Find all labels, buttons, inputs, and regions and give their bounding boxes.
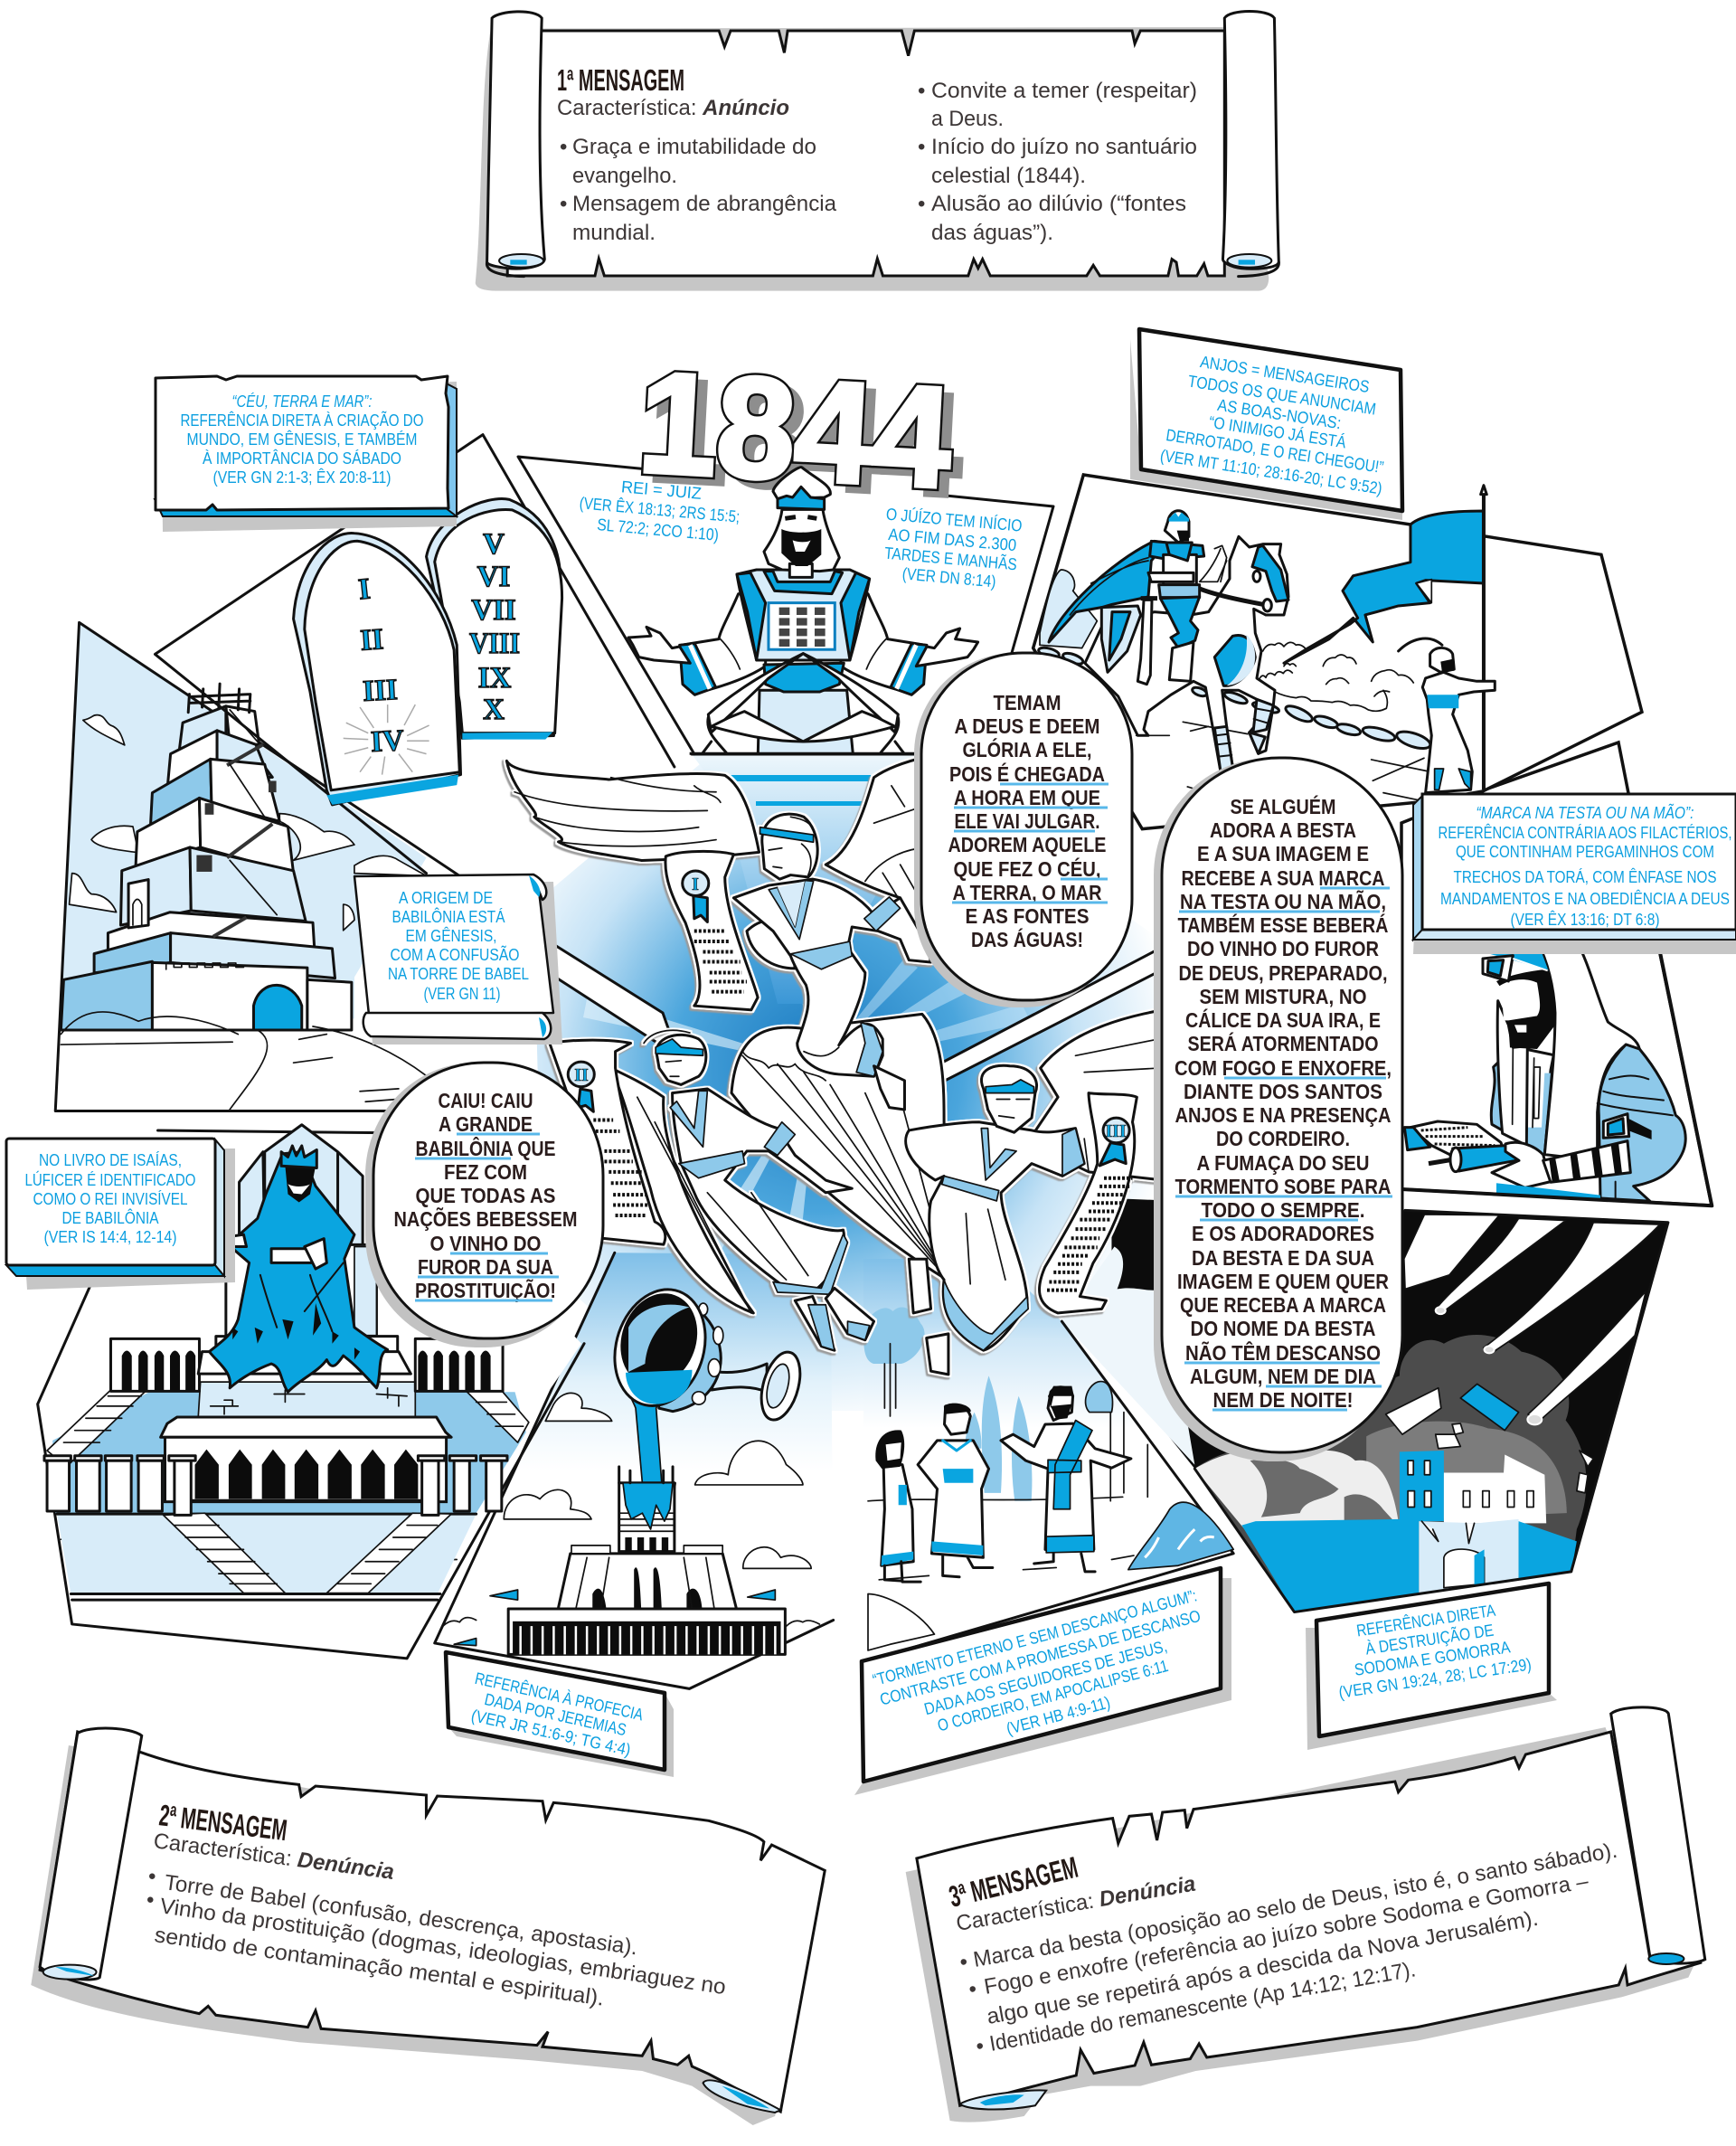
speech bubble: SE ALGUEM ADORA A BESTA: TODO O SEMPRE. bbox=[1201, 1198, 1365, 1222]
panel: paradise rest bbox=[862, 1259, 1233, 1662]
callout scroll: origem de Babilonia: NA TORRE DE BABEL bbox=[388, 964, 529, 983]
speech bubble: SE ALGUEM ADORA A BESTA: DIANTE DOS SANTOS bbox=[1184, 1080, 1382, 1103]
roman numerals on tablets: IX bbox=[478, 662, 511, 695]
callout: tormento eterno: (VER HB 4:9-11) bbox=[1005, 1692, 1112, 1738]
ground bbox=[868, 1497, 1134, 1580]
speech bubble: SE ALGUEM ADORA A BESTA: CÁLICE DA SUA IRA, E bbox=[1185, 1007, 1381, 1032]
trees bbox=[863, 1308, 925, 1364]
1844 number: 1844 bbox=[635, 343, 955, 518]
centre bush outlines bbox=[1260, 642, 1413, 711]
callout: anjos mensageiros: AS BOAS-NOVAS: bbox=[1216, 395, 1343, 432]
speech bubble: CAIU CAIU: PROSTITUIÇÃO! bbox=[415, 1278, 556, 1302]
speech bubble: SE ALGUEM ADORA A BESTA: NA TESTA OU NA MÃO, bbox=[1180, 889, 1386, 913]
seal numerals on scrolls: I bbox=[692, 874, 699, 894]
scroll: 3a mensagem: Característica: Denúncia bbox=[954, 1872, 1197, 1936]
illustration: stone tablets bbox=[294, 499, 562, 805]
youth bbox=[918, 1441, 989, 1557]
ground and road bbox=[61, 1012, 427, 1110]
cloud outlines bbox=[70, 715, 427, 931]
callout: anjos mensageiros: TODOS OS QUE ANUNCIAM bbox=[1187, 371, 1377, 419]
speech bubble: TEMAM A DEUS: A DEUS E DEEM bbox=[955, 714, 1099, 738]
scroll: 1a mensagem: • bbox=[918, 79, 925, 103]
callout: profecia jeremias: DADA POR JEREMIAS bbox=[483, 1689, 628, 1739]
tunic bbox=[737, 570, 870, 660]
scroll: 3a mensagem: Fogo e enxofre (referência ao juízo sobre Sodoma e Gomorra – bbox=[982, 1868, 1590, 1999]
callout: tormento eterno: “TORMENTO ETERNO E SEM DESCANÇO ALGUM”: bbox=[871, 1585, 1199, 1689]
angel 1 scroll bbox=[665, 851, 758, 1010]
scroll: 3a mensagem: • bbox=[967, 1977, 978, 2002]
speech bubble: TEMAM A DEUS: QUE FEZ O CÉU, bbox=[953, 856, 1101, 881]
callout scroll: origem de Babilonia: COM A CONFUSÃO bbox=[391, 945, 519, 964]
city bbox=[1400, 1451, 1444, 1521]
callout: sodoma e gomorra: À DESTRUIÇÃO DE bbox=[1364, 1621, 1495, 1659]
callout: sodoma e gomorra: SODOMA E GOMORRA bbox=[1353, 1637, 1512, 1679]
banner bbox=[1284, 511, 1484, 663]
callout: anjos mensageiros: (VER MT 11:10; 28:16-20; LC 9:52) bbox=[1159, 446, 1383, 497]
speech bubble: SE ALGUEM ADORA A BESTA: DO NOME DA BESTA bbox=[1190, 1317, 1376, 1340]
speech bubble: CAIU CAIU: BABILÔNIA QUE bbox=[416, 1136, 555, 1160]
seal numerals on scrolls: III bbox=[1105, 1121, 1127, 1141]
callout: tormento eterno: O CORDEIRO, EM APOCALIPSE 6:11 bbox=[936, 1656, 1170, 1735]
label: juizo 2300 tardes: TARDES E MANHÃS bbox=[883, 544, 1018, 573]
callout scroll: origem de Babilonia bbox=[354, 874, 562, 1045]
speech bubble: SE ALGUEM ADORA A BESTA: TORMENTO SOBE PARA bbox=[1175, 1175, 1391, 1198]
scroll: 3a mensagem: Identidade do remanescente (Ap 14:12; 12:17). bbox=[987, 1957, 1418, 2056]
scroll: 1a mensagem: a Deus. bbox=[931, 107, 1004, 131]
scroll: 1a mensagem: evangelho. bbox=[572, 164, 677, 188]
speech bubble: SE ALGUEM ADORA A BESTA: TAMBÉM ESSE BEBERÁ bbox=[1177, 912, 1389, 937]
scarves bbox=[708, 654, 803, 733]
seal numerals on scrolls: II bbox=[574, 1065, 589, 1085]
callout scroll: origem de Babilonia: BABILÔNIA ESTÁ bbox=[392, 907, 505, 926]
rider bbox=[1150, 541, 1204, 559]
scroll: 2a mensagem bbox=[31, 1728, 825, 2125]
callout: sodoma e gomorra: REFERÊNCIA DIRETA bbox=[1355, 1601, 1497, 1640]
callout: profecia jeremias bbox=[446, 1652, 674, 1777]
callout: ceu, terra e mar: MUNDO, EM GÊNESIS, E TAMBÉM bbox=[186, 430, 418, 449]
label: rei = juiz: REI = JUIZ bbox=[620, 477, 703, 503]
speech bubble: SE ALGUEM ADORA A BESTA: SE ALGUÉM bbox=[1230, 794, 1336, 818]
scroll: 1a mensagem: • bbox=[918, 192, 925, 216]
panel: king pedestal bbox=[692, 754, 922, 1004]
speech bubble: TEMAM A DEUS: E AS FONTES bbox=[966, 904, 1089, 928]
woman bbox=[882, 1465, 913, 1565]
angel 2 robe bbox=[673, 1089, 852, 1292]
angel 1 right wing bbox=[826, 757, 927, 960]
callout: sodoma e gomorra bbox=[1306, 1584, 1557, 1750]
scroll: 1a mensagem: 1ª MENSAGEM bbox=[557, 63, 684, 97]
scroll: 2a mensagem: • bbox=[146, 1864, 157, 1889]
horse bbox=[1085, 536, 1288, 771]
castle bbox=[619, 1483, 675, 1552]
callout: profecia jeremias: REFERÊNCIA À PROFECIA bbox=[473, 1669, 646, 1725]
callout: ceu, terra e mar: À IMPORTÂNCIA DO SÁBADO bbox=[203, 449, 401, 468]
angel 3 robe bbox=[906, 1122, 1084, 1350]
poured liquid bbox=[623, 1370, 693, 1529]
scroll: 1a mensagem: Graça e imutabilidade do bbox=[572, 135, 816, 159]
angel group bbox=[506, 757, 1163, 1375]
scroll: 1a mensagem bbox=[476, 11, 1278, 291]
left bush bbox=[1040, 570, 1097, 648]
label: juizo 2300 tardes: O JÚÍZO TEM INÍCIO bbox=[885, 505, 1023, 535]
speech bubble: SE ALGUEM ADORA A BESTA: NEM DE NOITE! bbox=[1213, 1388, 1353, 1412]
roman numerals on tablets: III bbox=[362, 674, 399, 708]
label: rei = juiz bbox=[577, 473, 742, 546]
callout scroll: origem de Babilonia: EM GÊNESIS, bbox=[405, 926, 497, 945]
speech bubble: CAIU CAIU: NAÇÕES BEBESSEM bbox=[394, 1206, 577, 1231]
smoke bbox=[1194, 1335, 1587, 1612]
scroll: 2a mensagem: Vinho da prostituição (dogmas, ideologias, embriaguez no bbox=[158, 1894, 728, 1999]
roman numerals on tablets: VII bbox=[471, 594, 516, 627]
illustration: high priest king bbox=[628, 468, 978, 753]
speech bubble: SE ALGUEM ADORA A BESTA: RECEBE A SUA MARCA bbox=[1181, 866, 1385, 890]
angel 3 head bbox=[981, 1065, 1037, 1132]
speech bubble: SE ALGUEM ADORA A BESTA: ADORA A BESTA bbox=[1210, 818, 1356, 842]
speech bubble: TEMAM A DEUS: POIS É CHEGADA bbox=[949, 761, 1105, 786]
callout: sodoma e gomorra: (VER GN 19:24, 28; LC 17:29) bbox=[1337, 1654, 1533, 1702]
speech bubble: SE ALGUEM ADORA A BESTA: DE DEUS, PREPARADO, bbox=[1179, 961, 1387, 985]
angel 3 wings bbox=[1027, 1010, 1163, 1180]
goblet bbox=[712, 1364, 767, 1392]
callout: isaias lucifer: LÚFICER É IDENTIFICADO bbox=[25, 1170, 195, 1189]
callout: isaias lucifer: COMO O REI INVISÍVEL bbox=[33, 1189, 188, 1208]
panel: Tower of Babel bbox=[55, 622, 459, 1111]
robed figure bbox=[209, 1152, 388, 1392]
callout: ceu, terra e mar: REFERÊNCIA DIRETA À CRIAÇÃO DO bbox=[181, 411, 423, 430]
callout: isaias lucifer bbox=[6, 1139, 235, 1290]
scroll: 1a mensagem: Característica: Anúncio bbox=[557, 96, 789, 120]
speech bubble: SE ALGUEM ADORA A BESTA: A FUMAÇA DO SEU bbox=[1197, 1151, 1369, 1175]
scroll: 1a mensagem: Mensagem de abrangência bbox=[572, 192, 837, 216]
flags bbox=[454, 1590, 775, 1646]
1844 number: 1844 bbox=[646, 351, 966, 525]
brick marks bbox=[61, 1388, 457, 1586]
panel: knight and banner bbox=[1033, 475, 1642, 829]
callout: isaias lucifer: DE BABILÔNIA bbox=[61, 1208, 159, 1227]
scroll: 3a mensagem: 3ª MENSAGEM bbox=[946, 1850, 1081, 1914]
callout: marca na testa: (VER ÊX 13:16; DT 6:8) bbox=[1510, 910, 1660, 929]
callout: marca na testa: “MARCA NA TESTA OU NA MÃO”: bbox=[1476, 803, 1694, 822]
callout: anjos mensageiros: ANJOS = MENSAGEIROS bbox=[1199, 352, 1371, 396]
panel: throne of Babylon bbox=[38, 1125, 584, 1659]
callout: isaias lucifer: NO LIVRO DE ISAÍAS, bbox=[39, 1150, 182, 1169]
callout: anjos mensageiros bbox=[1130, 329, 1402, 520]
callout scroll: origem de Babilonia: A ORIGEM DE bbox=[399, 888, 493, 907]
speech bubble: TEMAM A DEUS: GLÓRIA A ELE, bbox=[962, 737, 1092, 761]
angel 1 left wing bbox=[506, 761, 760, 861]
bushes bbox=[1128, 1502, 1233, 1570]
head and hood bbox=[764, 509, 839, 572]
scroll: 1a mensagem: Início do juízo no santuário bbox=[931, 135, 1197, 159]
label: juizo 2300 tardes bbox=[881, 505, 1023, 592]
angel 1 lower wing bbox=[731, 1014, 950, 1281]
central light burst background bbox=[533, 760, 1175, 1411]
label: juizo 2300 tardes: AO FIM DAS 2.300 bbox=[888, 525, 1017, 554]
Jesus figure bbox=[1001, 1423, 1131, 1549]
speech bubble: TEMAM A DEUS: A HORA EM QUE bbox=[954, 786, 1100, 809]
angel 1 mid feathers bbox=[747, 921, 795, 969]
speech bubble: TEMAM A DEUS: DAS ÁGUAS! bbox=[971, 927, 1083, 951]
roman numerals on tablets: VIII bbox=[469, 628, 520, 660]
scroll: 2a mensagem: • bbox=[145, 1887, 156, 1913]
panel: fire on the city bbox=[1061, 1198, 1668, 1612]
panel: scribe background bbox=[1401, 742, 1712, 1205]
scroll: 1a mensagem: • bbox=[560, 135, 567, 159]
scroll: 1a mensagem: • bbox=[918, 135, 925, 159]
roman numerals on tablets bbox=[357, 528, 520, 759]
speech bubble: SE ALGUEM ADORA A BESTA: COM FOGO E ENXOFRE, bbox=[1175, 1056, 1392, 1080]
hands bbox=[628, 627, 690, 663]
speech bubble: CAIU CAIU: CAIU! CAIU bbox=[438, 1089, 533, 1112]
speech bubble: SE ALGUEM ADORA A BESTA: ALGUM, NEM DE DIA bbox=[1190, 1365, 1376, 1388]
roman numerals on tablets: II bbox=[359, 623, 384, 657]
1844 number: 1844 bbox=[635, 343, 955, 518]
speech bubble: TEMAM A DEUS: TEMAM bbox=[993, 691, 1061, 714]
speech bubble: SE ALGUEM ADORA A BESTA: E A SUA IMAGEM E bbox=[1197, 842, 1369, 865]
roman numerals on tablets: V bbox=[483, 528, 505, 561]
scroll: 1a mensagem: Convite a temer (respeitar) bbox=[931, 79, 1197, 103]
speech bubble: CAIU CAIU: FUROR DA SUA bbox=[418, 1255, 553, 1279]
speech bubble: TEMAM A DEUS bbox=[914, 653, 1132, 1007]
scroll: 3a mensagem: • bbox=[974, 2034, 986, 2059]
angel 3 scroll bbox=[1040, 1093, 1137, 1313]
speech bubble: CAIU CAIU: FEZ COM bbox=[444, 1160, 527, 1184]
scroll: 1a mensagem: • bbox=[560, 192, 567, 216]
angel 1 robe bbox=[733, 879, 931, 1076]
roman numerals on tablets: IV bbox=[370, 724, 405, 759]
scroll: 1a mensagem: celestial (1844). bbox=[931, 164, 1086, 188]
speech bubble: CAIU CAIU: O VINHO DO bbox=[430, 1232, 541, 1255]
road stones bbox=[1038, 646, 1432, 752]
tower tiers bbox=[61, 684, 352, 1030]
angel 2 wing bbox=[611, 1068, 753, 1313]
pole bbox=[1482, 495, 1486, 789]
callout: isaias lucifer: (VER IS 14:4, 12-14) bbox=[43, 1227, 177, 1246]
speech bubble: SE ALGUEM ADORA A BESTA: NÃO TÊM DESCANSO bbox=[1185, 1340, 1381, 1365]
speech bubble: SE ALGUEM ADORA A BESTA: DA BESTA E DA SUA bbox=[1192, 1246, 1374, 1270]
falling building pieces bbox=[1386, 1388, 1441, 1434]
scroll: 3a mensagem: • bbox=[958, 1950, 969, 1975]
stairs bbox=[47, 1390, 529, 1593]
callout: anjos mensageiros: DERROTADO, E O REI CHEGOU!” bbox=[1165, 425, 1385, 477]
scroll: 1a mensagem: das águas”). bbox=[931, 221, 1053, 245]
scroll: 3a mensagem: Marca da besta (oposição ao selo de Deus, isto é, o santo sábado). bbox=[971, 1839, 1619, 1972]
scroll: 2a mensagem: sentido de contaminação mental e espiritual). bbox=[153, 1923, 606, 2011]
speech bubble: SE ALGUEM ADORA A BESTA: DO VINHO DO FUROR bbox=[1187, 937, 1379, 960]
roman numerals on tablets: I bbox=[357, 572, 372, 607]
speech bubble: CAIU CAIU bbox=[365, 1063, 603, 1347]
cape bbox=[1049, 541, 1166, 642]
clouds bbox=[504, 1393, 811, 1568]
speech bubble: TEMAM A DEUS: ELE VAI JULGAR. bbox=[955, 809, 1099, 833]
panel: cup of wrath bbox=[435, 1253, 834, 1688]
arms bbox=[681, 594, 766, 694]
callout: tormento eterno: CONTRASTE COM A PROMESSA DE DESCANSO bbox=[878, 1606, 1203, 1709]
scroll: 3a mensagem bbox=[906, 1707, 1705, 2122]
speech bubble: SE ALGUEM ADORA A BESTA bbox=[1154, 758, 1402, 1461]
angel 2 head bbox=[656, 1035, 706, 1084]
angel 2 scroll bbox=[550, 1040, 665, 1244]
roman numerals on tablets: X bbox=[483, 694, 505, 726]
seal numerals on scrolls bbox=[574, 874, 1127, 1141]
callout: profecia jeremias: (VER JR 51:6-9; TG 4:4) bbox=[469, 1706, 633, 1759]
label: rei = juiz: (VER ÊX 18:13; 2RS 15:5; bbox=[579, 493, 741, 526]
panel: tablets bbox=[155, 435, 675, 874]
speech bubble: SE ALGUEM ADORA A BESTA: SEM MISTURA, NO bbox=[1199, 985, 1367, 1008]
speech bubble: TEMAM A DEUS: ADOREM AQUELE bbox=[948, 833, 1107, 856]
callout: marca na testa bbox=[1413, 794, 1736, 954]
label: juizo 2300 tardes: (VER DN 8:14) bbox=[901, 563, 996, 591]
angel 1 head bbox=[762, 814, 817, 879]
scroll: 2a mensagem: Torre de Babel (confusão, descrença, apostasia). bbox=[163, 1870, 639, 1961]
scroll: 2a mensagem: Característica: Denúncia bbox=[152, 1829, 395, 1885]
speech bubble: SE ALGUEM ADORA A BESTA: E OS ADORADORES bbox=[1192, 1222, 1374, 1245]
soldier bbox=[1422, 672, 1495, 793]
label: rei = juiz: SL 72:2; 2CO 1:10) bbox=[596, 515, 720, 544]
smoke trails bbox=[1404, 1215, 1499, 1289]
speech bubble: SE ALGUEM ADORA A BESTA: SERÁ ATORMENTADO bbox=[1188, 1031, 1378, 1055]
callout: tormento eterno: DADA AOS SEGUIDORES DE JESUS, bbox=[922, 1636, 1169, 1718]
scroll: 1a mensagem: mundial. bbox=[572, 221, 656, 245]
callout: tormento eterno bbox=[854, 1568, 1231, 1795]
callout: anjos mensageiros: “O INIMIGO JÁ ESTÁ bbox=[1208, 412, 1348, 451]
speech bubble: CAIU CAIU: A GRANDE bbox=[439, 1112, 533, 1136]
scroll: 2a mensagem: 2ª MENSAGEM bbox=[157, 1798, 289, 1847]
roman numerals on tablets: VI bbox=[477, 561, 510, 593]
scroll: 1a mensagem: Alusão ao dilúvio (“fontes bbox=[931, 192, 1186, 216]
callout: ceu, terra e mar: (VER GN 2:1-3; ÊX 20:8-11) bbox=[213, 468, 391, 487]
speech bubble: SE ALGUEM ADORA A BESTA: IMAGEM E QUEM QUER bbox=[1177, 1270, 1389, 1293]
callout scroll: origem de Babilonia: (VER GN 11) bbox=[423, 984, 501, 1003]
speech bubble: TEMAM A DEUS: A TERRA, O MAR bbox=[953, 881, 1102, 904]
scroll: 3a mensagem: algo que se repetirá após a descida da Nova Jerusalém). bbox=[985, 1906, 1540, 2029]
illustration: scribe with phylacteries bbox=[1401, 941, 1712, 1205]
callout: ceu, terra e mar: “CÉU, TERRA E MAR”: bbox=[231, 392, 373, 411]
panel: high priest judge bbox=[518, 457, 1053, 754]
callout: ceu, terra e mar bbox=[155, 376, 457, 532]
speech bubble: SE ALGUEM ADORA A BESTA: ANJOS E NA PRESENÇA bbox=[1175, 1103, 1391, 1127]
speech bubble: CAIU CAIU: QUE TODAS AS bbox=[416, 1184, 555, 1207]
shield bbox=[1101, 606, 1141, 672]
throne back bbox=[240, 1125, 363, 1247]
speech bubble: SE ALGUEM ADORA A BESTA: DO CORDEIRO. bbox=[1216, 1127, 1350, 1150]
speech bubble: SE ALGUEM ADORA A BESTA: QUE RECEBA A MARCA bbox=[1180, 1293, 1386, 1317]
